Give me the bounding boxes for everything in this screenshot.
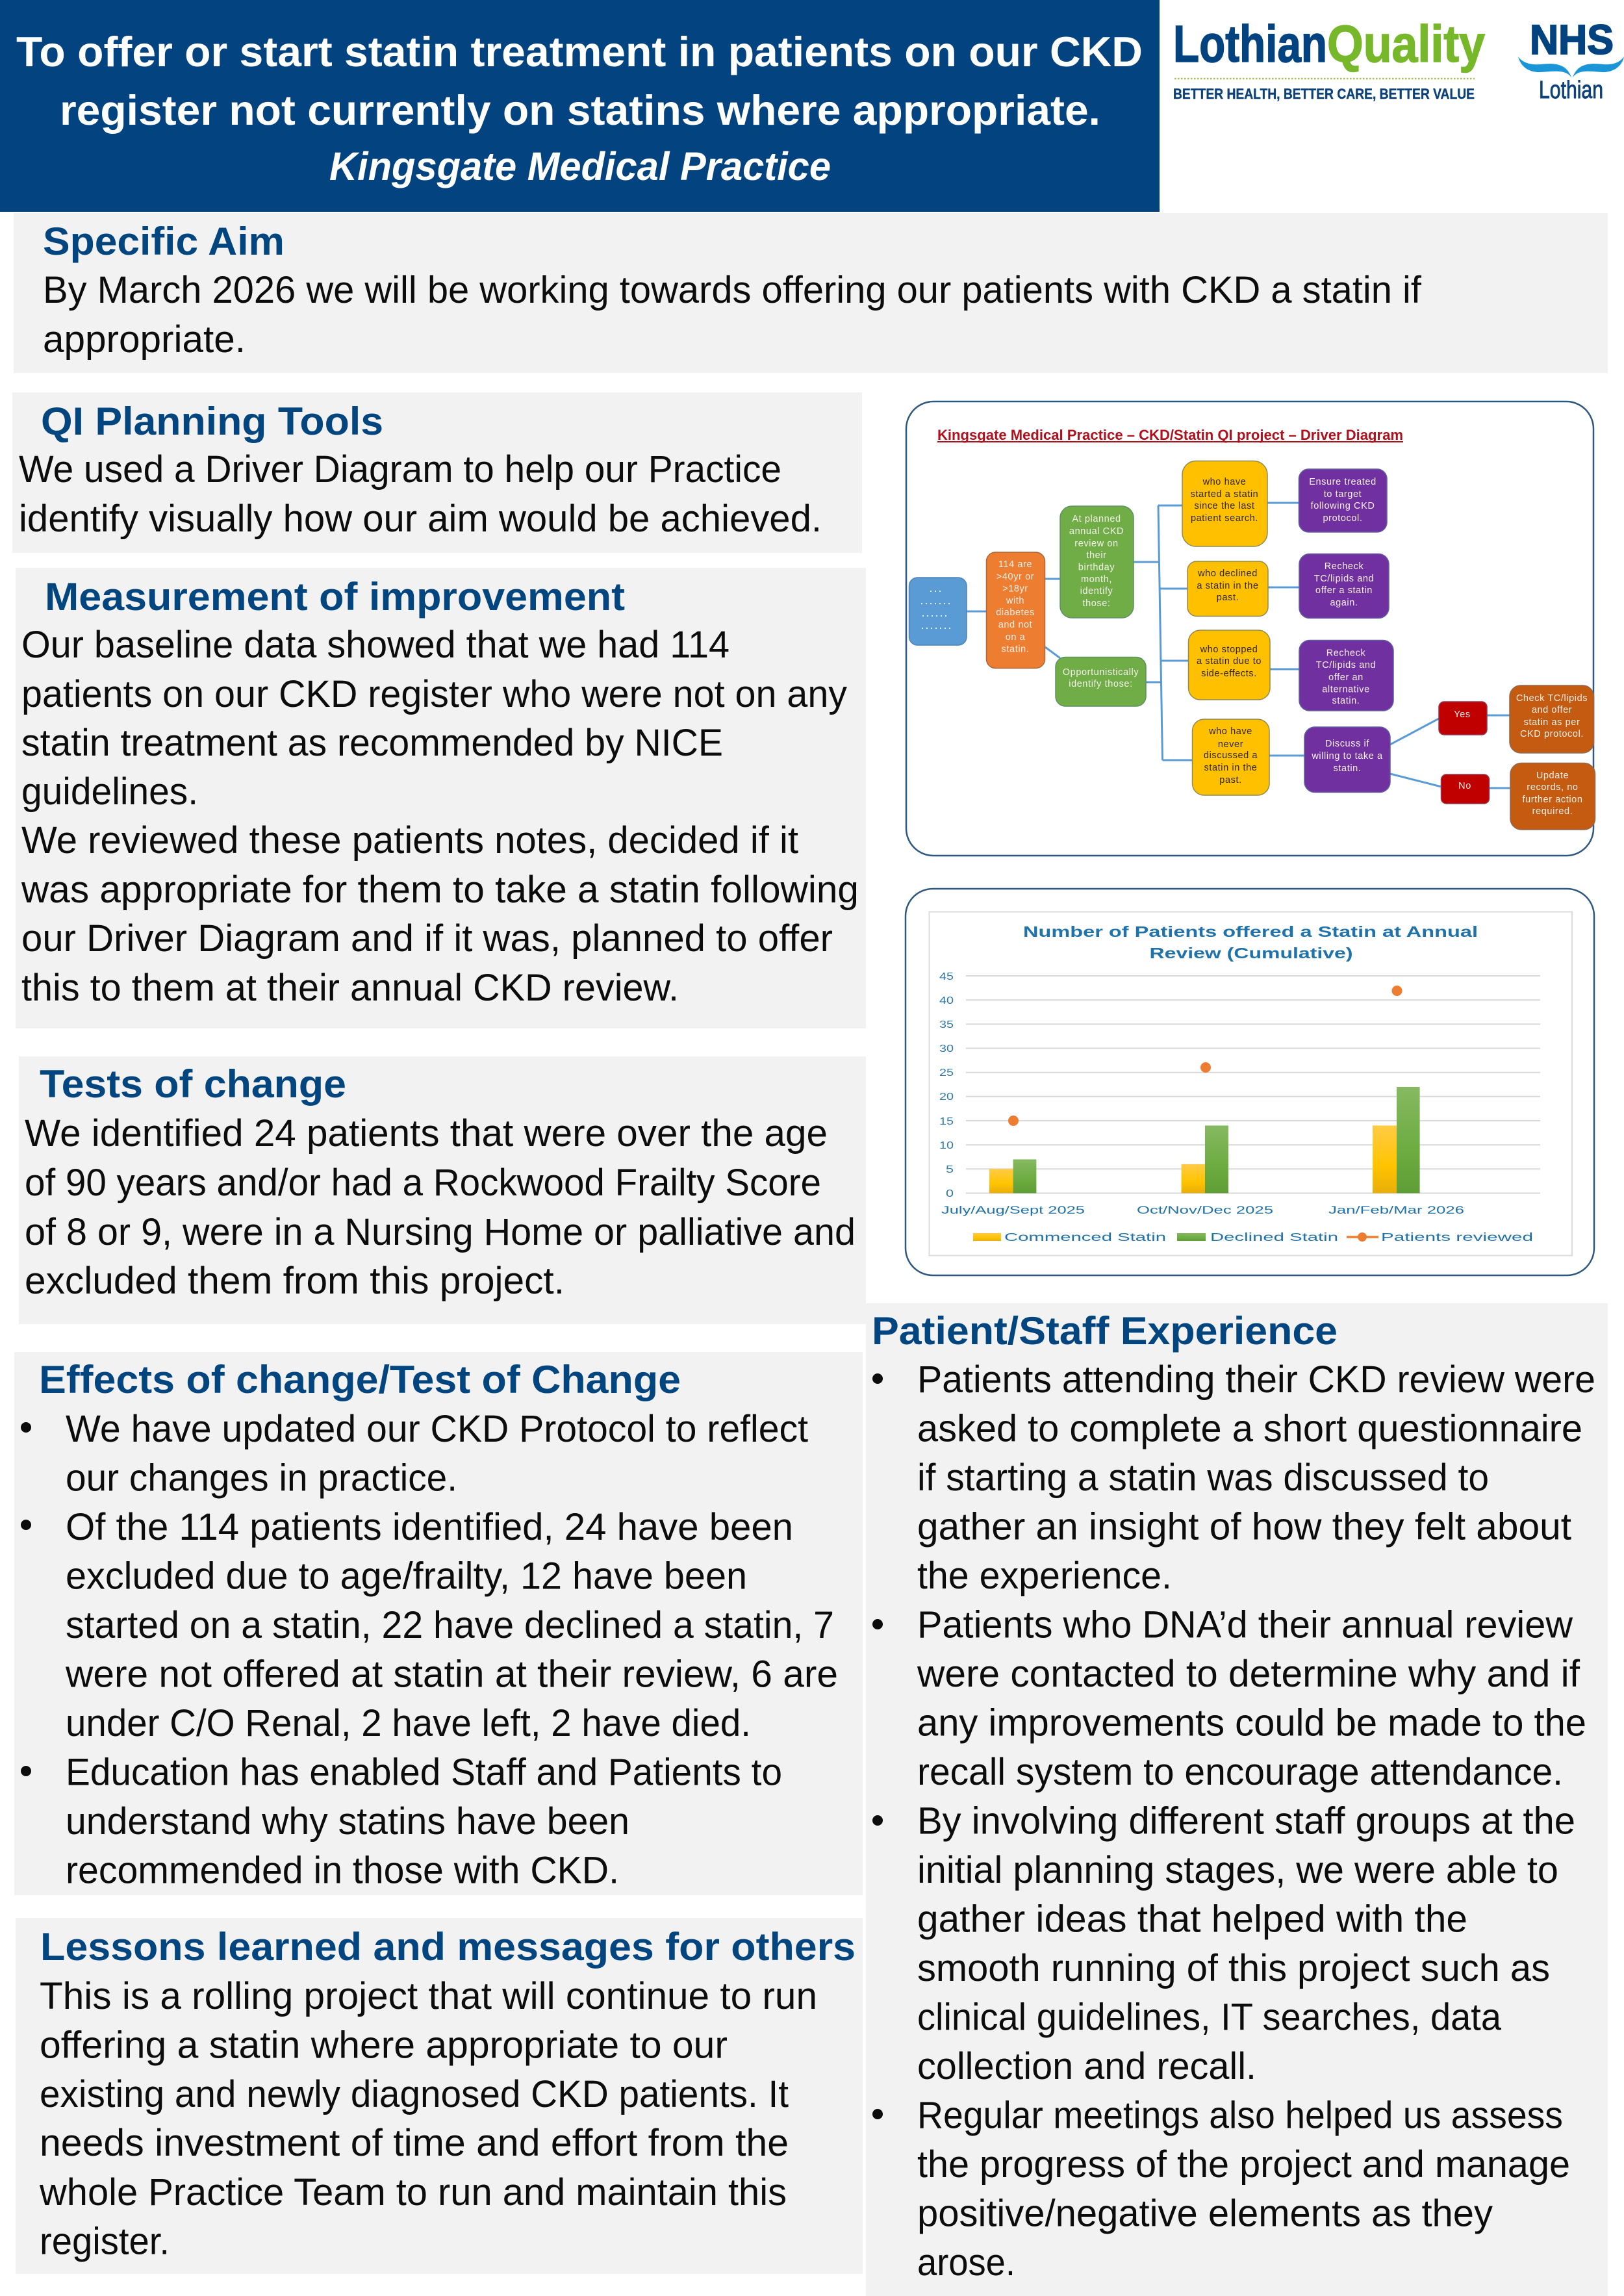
text: measurement of improvement: Our baseline data showed that we had 114 bbox=[21, 624, 730, 666]
bullet list: patient and staff experience: any improvements could be made to the bbox=[917, 1702, 1586, 1744]
text: specific aim: appropriate. bbox=[43, 318, 246, 361]
box: green annual review: annual CKD bbox=[1069, 526, 1124, 537]
box: yellow declined: who declined bbox=[1197, 568, 1258, 579]
box: green annual review: identify bbox=[1080, 586, 1113, 596]
box: yellow stopped: a statin due to bbox=[1197, 656, 1262, 667]
bullet list: patient and staff experience: Patients attending their CKD review were bbox=[917, 1358, 1595, 1401]
title banner: Kingsgate Medical Practice bbox=[329, 144, 831, 188]
logo: Lothian Quality: Lothian bbox=[1173, 15, 1327, 73]
panel: measurement of improvement bbox=[16, 568, 866, 1028]
box: orange population: with bbox=[1006, 596, 1024, 606]
box: green annual review: those: bbox=[1082, 598, 1111, 609]
text: measurement of improvement: was appropriate for them to take a statin following bbox=[21, 869, 859, 911]
x axis labels: July/Aug/Sept 2025 bbox=[941, 1204, 1085, 1216]
bullet list: patient and staff experience: Regular meetings also helped us assess bbox=[917, 2095, 1563, 2136]
text: lessons learned: This is a rolling project that will continue to run bbox=[40, 1975, 817, 2017]
box: orange population: >40yr or bbox=[996, 572, 1034, 582]
box: yellow never discussed: past. bbox=[1219, 775, 1242, 785]
text: tests of change: We identified 24 patients that were over the age bbox=[25, 1112, 828, 1154]
box: purple recheck again: Recheck bbox=[1325, 561, 1364, 572]
legend: Declined Statin bbox=[1210, 1231, 1338, 1244]
box: green annual review bbox=[1060, 506, 1134, 618]
bullet list: patient and staff experience: collection and recall. bbox=[917, 2045, 1256, 2087]
bullet list: effects of change: our changes in practice. bbox=[66, 1457, 457, 1499]
box: purple recheck alternative: alternative bbox=[1322, 685, 1370, 695]
bullet list: patient and staff experience: were contacted to determine why and if bbox=[917, 1653, 1580, 1695]
bullet list: effects of change bbox=[21, 1408, 838, 1892]
y axis and gridlines: 5 bbox=[946, 1164, 954, 1175]
x axis labels bbox=[941, 1204, 1464, 1216]
text: tests of change: of 8 or 9, were in a Nursing Home or palliative and bbox=[25, 1211, 856, 1253]
box: brown update records: Update bbox=[1536, 771, 1569, 781]
y axis and gridlines: 30 bbox=[939, 1043, 954, 1054]
logo: NHS Lothian bbox=[1518, 16, 1624, 104]
y axis and gridlines: 35 bbox=[939, 1019, 954, 1030]
text: lessons learned: needs investment of time and effort from the bbox=[40, 2122, 789, 2164]
box: orange population: diabetes bbox=[996, 607, 1035, 618]
text: measurement of improvement: our Driver Diagram and if it was, planned to offer bbox=[21, 917, 833, 960]
y axis and gridlines: 0 bbox=[946, 1188, 954, 1199]
box: purple recheck again: offer a statin bbox=[1315, 585, 1373, 596]
y axis and gridlines: 45 bbox=[939, 971, 954, 982]
box: green annual review: their bbox=[1086, 550, 1107, 561]
panel: effects of change bbox=[14, 1352, 863, 1895]
panel: chart bbox=[906, 889, 1594, 1275]
text: tests of change bbox=[25, 1112, 856, 1302]
box: yellow never discussed bbox=[1193, 719, 1269, 795]
box: green annual review: At planned bbox=[1072, 514, 1121, 524]
box: yellow started: who have bbox=[1202, 477, 1246, 487]
bullet list: patient and staff experience: positive/negative elements as they bbox=[917, 2192, 1493, 2235]
logo: NHS Lothian: NHS bbox=[1530, 16, 1614, 63]
panel: patient and staff experience bbox=[866, 1303, 1608, 2296]
box: green annual review: review on bbox=[1074, 539, 1119, 549]
y axis and gridlines bbox=[939, 971, 1540, 1199]
bullet list: patient and staff experience: Patients who DNA’d their annual review bbox=[917, 1603, 1573, 1646]
bullet list: effects of change: started on a statin, 22 have declined a statin, 7 bbox=[66, 1604, 834, 1646]
box: orange population: and not bbox=[998, 620, 1032, 630]
text: QI planning tools: We used a Driver Diagram to help our Practice bbox=[19, 448, 781, 491]
box: orange population: 114 are bbox=[998, 559, 1032, 570]
text: QI planning tools: identify visually how our aim would be achieved. bbox=[19, 498, 822, 540]
box: purple recheck alternative: Recheck bbox=[1326, 648, 1365, 659]
logo: Lothian Quality: Quality bbox=[1327, 15, 1485, 73]
bullet list: patient and staff experience: By involving different staff groups at the bbox=[917, 1800, 1575, 1843]
box: purple discuss: statin. bbox=[1334, 763, 1361, 774]
legend bbox=[973, 1231, 1533, 1244]
x axis labels: Oct/Nov/Dec 2025 bbox=[1137, 1204, 1273, 1216]
box: red yes bbox=[1439, 702, 1487, 735]
box: yellow declined bbox=[1187, 561, 1268, 616]
title banner: To offer or start statin treatment in patients on our CKD bbox=[16, 28, 1143, 75]
text: lessons learned: register. bbox=[40, 2221, 170, 2262]
bullet list: patient and staff experience: gather ideas that helped with the bbox=[917, 1898, 1467, 1940]
bullet list: effects of change: Of the 114 patients identified, 24 have been bbox=[66, 1506, 793, 1548]
bars: commenced statin bbox=[989, 1125, 1397, 1193]
box: yellow stopped: who stopped bbox=[1200, 644, 1258, 655]
legend: Commenced Statin bbox=[1004, 1231, 1166, 1244]
box: purple discuss bbox=[1304, 727, 1390, 793]
box: purple recheck again: again. bbox=[1330, 598, 1358, 608]
bullet list: patient and staff experience: arose. bbox=[917, 2241, 1015, 2284]
bars: declined statin bbox=[1013, 1087, 1420, 1193]
title banner: register not currently on statins where appropriate. bbox=[60, 86, 1100, 134]
box: green opportunistic: identify those: bbox=[1069, 679, 1133, 689]
box: yellow started: since the last bbox=[1194, 501, 1255, 511]
text: lessons learned: whole Practice Team to run and maintain this bbox=[39, 2171, 787, 2213]
y axis and gridlines: 40 bbox=[939, 995, 954, 1006]
box: purple discuss: willing to take a bbox=[1311, 751, 1383, 761]
box: orange population: statin. bbox=[1002, 644, 1029, 655]
title banner bbox=[0, 0, 1160, 212]
box: purple recheck alternative: statin. bbox=[1332, 696, 1360, 706]
panel: QI planning tools bbox=[12, 392, 862, 553]
box: red no: No bbox=[1458, 781, 1471, 791]
heading: QI planning tools: QI Planning Tools bbox=[41, 400, 383, 443]
box: orange population: on a bbox=[1006, 632, 1026, 643]
box: purple recheck again: TC/lipids and bbox=[1314, 574, 1374, 584]
text: specific aim bbox=[43, 269, 1422, 361]
box: yellow never discussed: who have bbox=[1208, 726, 1252, 737]
box: brown update records: required. bbox=[1532, 806, 1573, 817]
text: measurement of improvement: statin treatment as recommended by NICE bbox=[21, 722, 723, 764]
box: brown update records: further action bbox=[1522, 795, 1583, 805]
chart title: Number of Patients offered a Statin at Annual bbox=[1023, 923, 1478, 940]
text: tests of change: of 90 years and/or had a Rockwood Frailty Score bbox=[25, 1162, 821, 1204]
bullet list: effects of change: were not offered at statin at their review, 6 are bbox=[65, 1653, 838, 1696]
markers: patients reviewed bbox=[1008, 986, 1402, 1126]
box: brown check lipids: statin as per bbox=[1524, 717, 1580, 728]
box: yellow stopped bbox=[1189, 630, 1270, 700]
box: purple ensure treated: protocol. bbox=[1323, 513, 1363, 524]
y axis and gridlines: 15 bbox=[939, 1116, 954, 1127]
bullet list: patient and staff experience: gather an insight of how they felt about bbox=[917, 1506, 1571, 1548]
box: purple ensure treated: to target bbox=[1324, 489, 1362, 500]
text: measurement of improvement: patients on our CKD register who were not on any bbox=[21, 673, 847, 715]
box: red no bbox=[1441, 774, 1489, 804]
text: specific aim: By March 2026 we will be working towards offering our patients with CKD a statin if bbox=[43, 269, 1422, 311]
box: purple ensure treated bbox=[1299, 469, 1387, 532]
chart title bbox=[1023, 923, 1478, 962]
y axis and gridlines: 20 bbox=[939, 1091, 954, 1103]
bullet list: patient and staff experience bbox=[872, 1358, 1595, 2284]
box: red yes: Yes bbox=[1454, 709, 1471, 720]
bullet list: patient and staff experience: the experience. bbox=[917, 1555, 1172, 1597]
box: yellow started bbox=[1182, 461, 1267, 546]
box: yellow never discussed: discussed a bbox=[1204, 750, 1258, 761]
heading: patient and staff experience: Patient/Staff Experience bbox=[872, 1309, 1338, 1353]
bullet list: effects of change: excluded due to age/frailty, 12 have been bbox=[66, 1555, 747, 1597]
bullet list: patient and staff experience: smooth running of this project such as bbox=[917, 1947, 1550, 1989]
bullet list: patient and staff experience: initial planning stages, we were able to bbox=[917, 1849, 1558, 1891]
text: lessons learned: offering a statin where appropriate to our bbox=[40, 2024, 728, 2066]
box: brown check lipids: Check TC/lipids bbox=[1516, 693, 1588, 704]
bullet list: patient and staff experience: asked to complete a short questionnaire bbox=[917, 1407, 1582, 1450]
text: lessons learned: existing and newly diagnosed CKD patients. It bbox=[40, 2073, 789, 2115]
logo: Lothian Quality: BETTER HEALTH, BETTER CARE, BETTER VALUE bbox=[1173, 86, 1475, 102]
heading: tests of change: Tests of change bbox=[40, 1062, 346, 1106]
box: brown check lipids bbox=[1510, 685, 1594, 753]
chart frame bbox=[929, 912, 1572, 1255]
bullet list: effects of change: under C/O Renal, 2 have left, 2 have died. bbox=[66, 1702, 751, 1744]
heading: effects of change: Effects of change/Test of Change bbox=[39, 1358, 681, 1401]
bullet list: patient and staff experience: recall system to encourage attendance. bbox=[917, 1751, 1563, 1793]
bullet list: patient and staff experience: the progress of the project and manage bbox=[917, 2143, 1570, 2186]
box: yellow declined: past. bbox=[1217, 593, 1239, 603]
bullet list: effects of change: We have updated our CKD Protocol to reflect bbox=[66, 1408, 808, 1450]
box: purple discuss: Discuss if bbox=[1325, 739, 1369, 749]
bullet list: effects of change: Education has enabled Staff and Patients to bbox=[66, 1752, 782, 1793]
box: orange population: >18yr bbox=[1002, 583, 1028, 594]
heading: specific aim: Specific Aim bbox=[43, 220, 285, 263]
connectors bbox=[967, 503, 1510, 788]
text: measurement of improvement: this to them at their annual CKD review. bbox=[21, 967, 679, 1009]
box: green annual review: birthday bbox=[1078, 563, 1115, 573]
box: yellow stopped: side-effects. bbox=[1201, 669, 1257, 679]
text: measurement of improvement: guidelines. bbox=[21, 771, 198, 813]
box: brown check lipids: CKD protocol. bbox=[1520, 729, 1584, 739]
box: green opportunistic: Opportunistically bbox=[1063, 667, 1139, 678]
bullet list: patient and staff experience: clinical guidelines, IT searches, data bbox=[917, 1996, 1502, 2039]
box: purple ensure treated: Ensure treated bbox=[1309, 477, 1377, 487]
text: tests of change: excluded them from this project. bbox=[25, 1260, 565, 1302]
bullet list: patient and staff experience: if starting a statin was discussed to bbox=[917, 1457, 1489, 1499]
box: green annual review: month, bbox=[1081, 574, 1112, 585]
box: brown check lipids: and offer bbox=[1532, 705, 1572, 715]
box: yellow started: started a statin bbox=[1191, 489, 1258, 500]
box: yellow never discussed: never bbox=[1218, 739, 1243, 750]
box: purple recheck alternative: TC/lipids and bbox=[1316, 660, 1376, 670]
box: purple recheck again bbox=[1299, 554, 1389, 619]
logo: NHS Lothian: Lothian bbox=[1539, 77, 1603, 104]
bullet list: effects of change: understand why statins have been bbox=[66, 1800, 629, 1843]
box: brown update records: records, no bbox=[1527, 782, 1579, 793]
diagram title: Kingsgate Medical Practice – CKD/Statin QI project – Driver Diagram bbox=[937, 427, 1403, 443]
text: lessons learned bbox=[39, 1975, 817, 2262]
box: yellow started: patient search. bbox=[1191, 513, 1258, 524]
x axis labels: Jan/Feb/Mar 2026 bbox=[1328, 1204, 1464, 1216]
box: orange population bbox=[986, 552, 1045, 668]
box: purple ensure treated: following CKD bbox=[1311, 501, 1375, 511]
box: purple recheck alternative bbox=[1299, 641, 1393, 711]
box: yellow declined: a statin in the bbox=[1197, 581, 1259, 591]
box: yellow never discussed: statin in the bbox=[1204, 763, 1257, 773]
heading: measurement of improvement: Measurement of improvement bbox=[45, 575, 625, 619]
box: brown update records bbox=[1510, 763, 1595, 830]
text: measurement of improvement bbox=[21, 624, 859, 1009]
chart title: Review (Cumulative) bbox=[1150, 945, 1352, 962]
text: measurement of improvement: We reviewed these patients notes, decided if it bbox=[21, 819, 798, 861]
box: green opportunistic bbox=[1056, 657, 1146, 706]
y axis and gridlines: 10 bbox=[939, 1140, 954, 1151]
text: QI planning tools bbox=[19, 448, 822, 540]
panel: tests of change bbox=[19, 1056, 866, 1324]
bullet list: effects of change: recommended in those with CKD. bbox=[66, 1849, 619, 1892]
heading: lessons learned: Lessons learned and messages for others bbox=[40, 1925, 856, 1969]
box: purple recheck alternative: offer an bbox=[1328, 672, 1364, 683]
y axis and gridlines: 25 bbox=[939, 1067, 954, 1078]
box: blue start bbox=[909, 578, 967, 645]
legend: Patients reviewed bbox=[1381, 1231, 1533, 1244]
panel: driver diagram bbox=[906, 402, 1595, 856]
logo: Lothian Quality bbox=[1173, 15, 1485, 102]
panel: lessons learned bbox=[16, 1918, 863, 2274]
panel: specific aim bbox=[14, 213, 1608, 373]
